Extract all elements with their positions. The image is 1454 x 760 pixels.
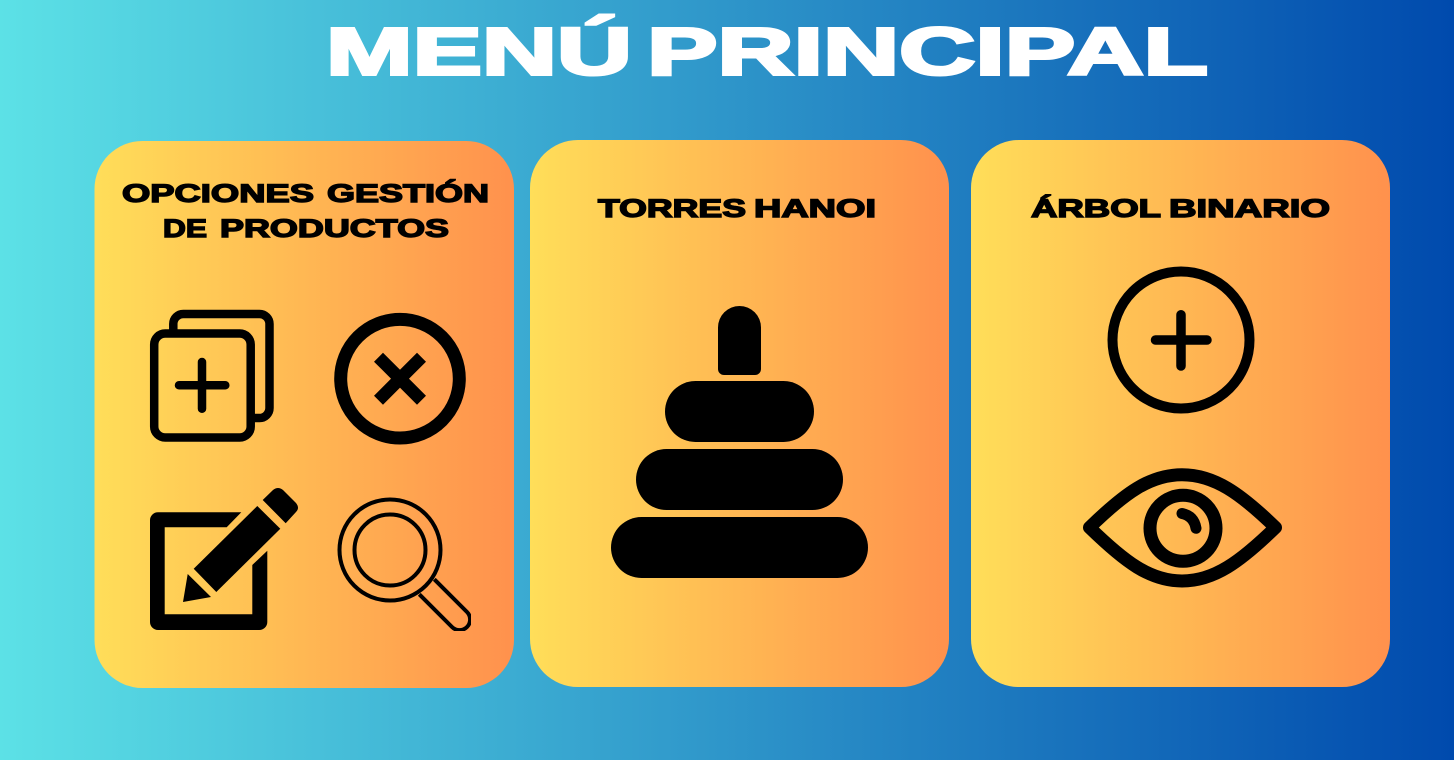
icon: search <box>340 500 470 630</box>
panel: árbol binario <box>971 140 1390 687</box>
panel: opciones gestión de productos <box>94 141 514 688</box>
heading: torres hanoi <box>598 195 876 223</box>
heading: árbol binario <box>1031 194 1330 223</box>
heading: opciones gestión de productos: DE <box>163 215 207 243</box>
panel: torres hanoi <box>530 140 949 687</box>
panel background: hanoi <box>530 140 949 687</box>
title: MENÚ <box>326 14 632 90</box>
heading: opciones gestión de productos: PRODUCTOS <box>220 215 449 243</box>
panel background: products <box>94 141 514 688</box>
icon: tower of hanoi <box>611 306 868 578</box>
heading: árbol binario: BINARIO <box>1169 195 1330 223</box>
icon: eye <box>1090 475 1276 581</box>
heading: opciones gestión de productos: GESTIÓN <box>327 178 489 208</box>
icon: add circle <box>1112 272 1250 408</box>
heading: torres hanoi: TORRES <box>598 195 746 223</box>
heading: opciones gestión de productos <box>122 178 489 243</box>
heading: opciones gestión de productos: OPCIONES <box>122 180 314 208</box>
icon: delete <box>341 319 459 438</box>
heading: torres hanoi: HANOI <box>754 195 876 223</box>
heading: árbol binario: ÁRBOL <box>1031 194 1161 223</box>
title <box>326 14 1208 90</box>
title: PRINCIPAL <box>647 14 1208 90</box>
icon: add copy <box>154 314 270 438</box>
panel background: tree <box>971 140 1390 687</box>
icon: edit <box>150 488 298 630</box>
